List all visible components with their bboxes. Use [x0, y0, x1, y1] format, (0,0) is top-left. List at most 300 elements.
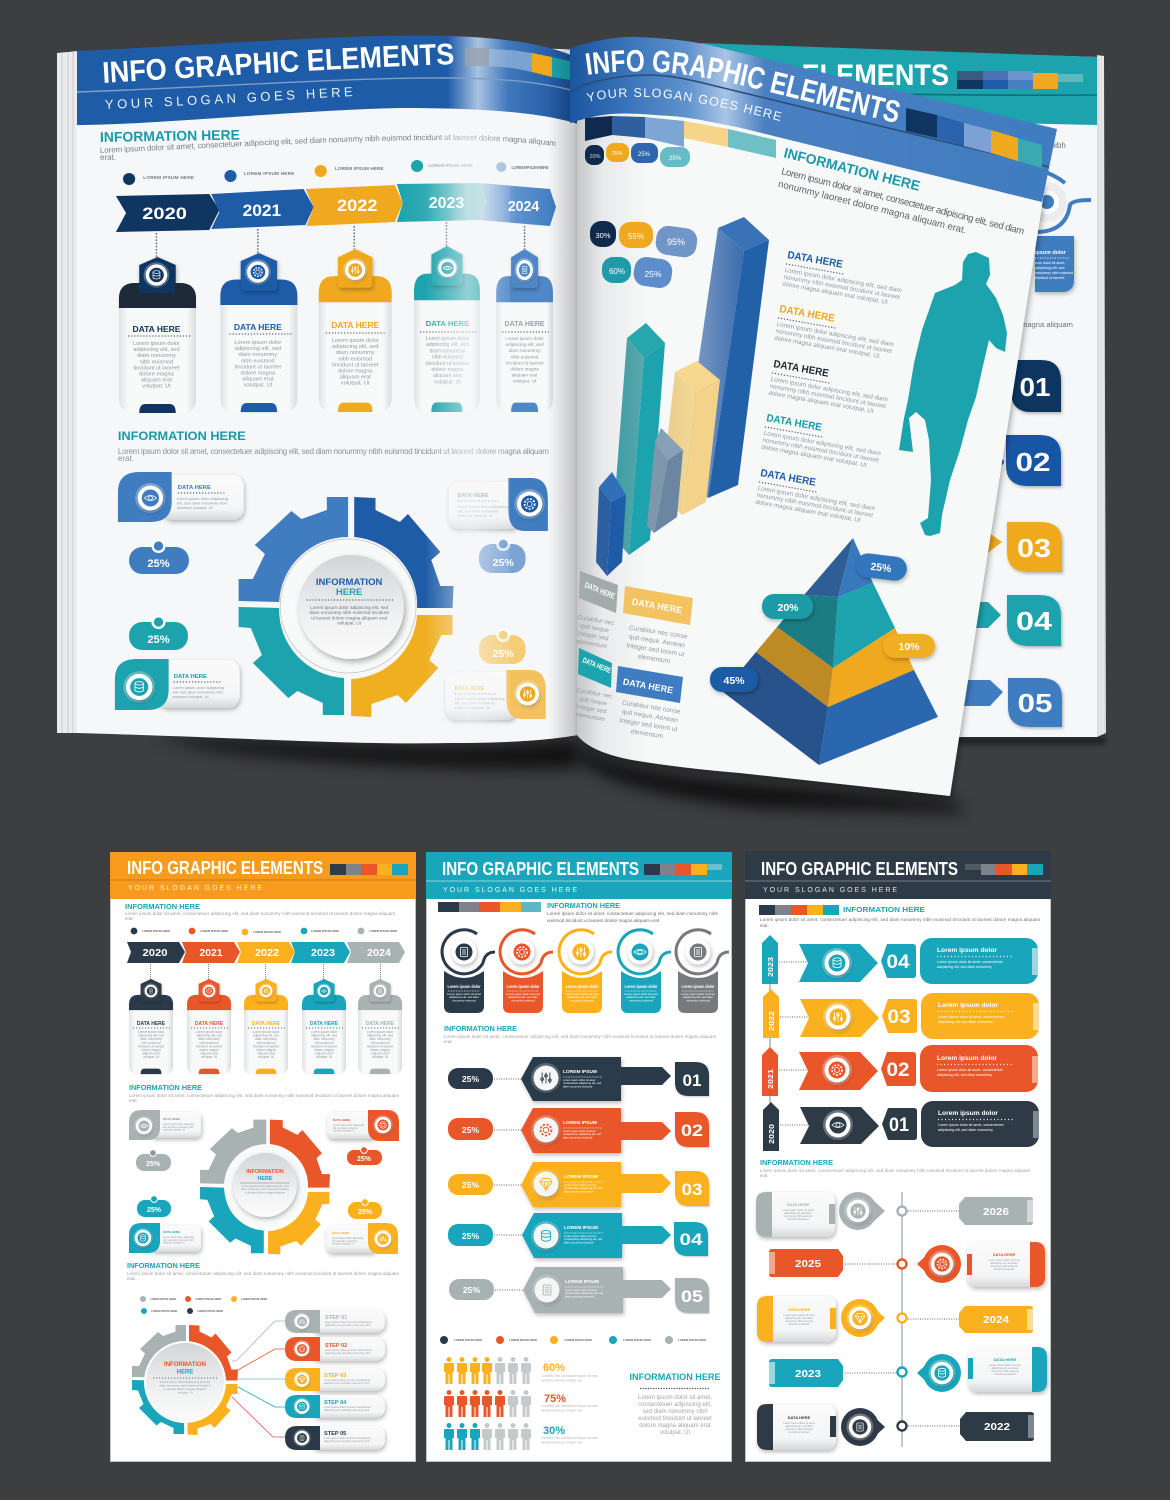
label teal [572, 648, 612, 724]
arrow timeline: 2022 [255, 948, 279, 959]
gear chart: INFORMATION [246, 1169, 284, 1175]
front page title: INFO GRAPHIC ELEMENTS [586, 50, 900, 122]
data card yellow: nibh euismod [257, 1041, 276, 1045]
callout top right: DATA HERE [333, 1118, 350, 1122]
timeline row 2022 [757, 1404, 1034, 1450]
arrow timeline [127, 942, 405, 963]
data card 2023: Lorem ipsum dolor [426, 336, 470, 342]
data card 2021: DATA HERE [234, 322, 282, 332]
row 01 2020: 2020 [767, 1124, 776, 1144]
label blue: elementum [630, 728, 664, 740]
row 02 2021: Lorem ipsum dolor [937, 1055, 998, 1062]
step 02: adipiscing elit, sed diam nonummy nibh [325, 1351, 371, 1355]
data card 2024: Lorem ipsum dolor [505, 336, 544, 341]
callout top right: euismod volutpat. Ut [333, 1130, 355, 1133]
data block 4 [761, 412, 884, 471]
data card teal [302, 979, 346, 1074]
data card yellow: aliquam erat [257, 1052, 275, 1056]
heading 2: INFORMATION HERE [444, 1024, 517, 1033]
label yellow: quit neque. Aenean [628, 634, 686, 649]
data block 5: dolore magna aliquam erat volutpat. Ut [755, 499, 861, 524]
callout top right: elit, sed diam nonummy [333, 1127, 359, 1130]
data card 2022: dolore magna [338, 369, 373, 374]
data card red: nibh euismod [200, 1041, 219, 1045]
data card grey: tincidunt ut laoreet [367, 1044, 393, 1048]
percent pill yellow: 25% [493, 648, 515, 660]
data card 2022 [319, 249, 392, 412]
data card 2020: aliquam erat [141, 378, 172, 384]
arrow timeline: 2020 [142, 948, 168, 959]
timeline row 2022: 2022 [984, 1421, 1010, 1433]
ring card teal: Lorem ipsum dolor [624, 984, 658, 989]
data card 2022: diam nonummy [336, 350, 375, 356]
ring card yellow [559, 930, 612, 1013]
timeline row 2023: adipiscing elit, sed diam [991, 1366, 1019, 1370]
heading 3: INFORMATION HERE [127, 1261, 200, 1270]
ring card teal: nonummy euismod [629, 998, 653, 1002]
step 01: Lorem ipsum dolor sit amet consectetuer [325, 1320, 372, 1324]
timeline row 2022: nonummy nibh euismod [785, 1427, 813, 1431]
data card 2022: aliquam erat [340, 375, 371, 381]
timeline arrow 2024: 2024 [508, 198, 540, 215]
data card teal: Lorem ipsum dolor [311, 1030, 338, 1034]
teal header: YOUR SLOGAN GOES HERE [443, 887, 577, 894]
ring card navy: Lorem ipsum dolor [448, 984, 481, 989]
legend: LOREM IPSUM HERE [678, 1338, 706, 1342]
heading 2 [760, 1158, 1030, 1178]
data block 4: DATA HERE [765, 412, 823, 434]
data card 2020 [119, 257, 196, 413]
ring card yellow: adipiscing elit, sed diam [567, 995, 598, 999]
heading: erat. [125, 916, 134, 921]
step 04: Lorem ipsum dolor sit amet consectetuer [324, 1405, 371, 1409]
percent pills: 25% [357, 1156, 372, 1163]
swatch strip and heading: Lorem ipsum dolor sit amet, consectetuer adipiscing elit, sed diam nonummy nibh [547, 911, 718, 916]
heading 2: erat. [129, 1098, 138, 1103]
data card 2023: DATA HERE [426, 319, 469, 328]
row 02: diam nonummy euismod [563, 1135, 593, 1139]
label teal: elementum [575, 712, 605, 723]
data card teal: dolore magna [314, 1048, 334, 1052]
pyramid label 20%: 20% [777, 602, 799, 614]
timeline arrow 2020: 2020 [142, 204, 187, 223]
callout bottom left: Lorem ipsum dolor adipiscing [163, 1236, 195, 1239]
row 04: Lorem ipsum dolor sit amet [564, 1234, 597, 1238]
timeline row 2022: Lorem ipsum dolor sit amet [783, 1421, 815, 1425]
timeline row 2025: Lorem ipsum dolor sit amet [988, 1258, 1020, 1262]
ring card teal: adipiscing elit, sed diam [626, 995, 657, 999]
callout top right: euismod volutpat. Ut [458, 514, 494, 518]
row 03: LOREM IPSUM [564, 1174, 598, 1180]
percent pill light blue: 25% [493, 557, 515, 569]
ring card red [500, 930, 553, 1013]
row 02 2021: 02 [886, 1060, 910, 1081]
small gear [132, 1325, 238, 1435]
front heading: Lorem ipsum dolor sit amet, consectetuer adipiscing elit, sed diam [780, 166, 1025, 237]
swatch strip and heading: euismod tincidunt ut laoreet dolore magna aliquam erat. [547, 918, 660, 923]
dark header: YOUR SLOGAN GOES HERE [763, 887, 897, 894]
small gear: HERE [177, 1370, 193, 1376]
callout top right: DATA HERE [458, 493, 489, 499]
people chart row 75%: Curabitur nec consequat neque. Aenean [541, 1404, 598, 1408]
data card 2022: volutpat. Ut [341, 381, 370, 387]
pyramid label 25% [855, 552, 908, 582]
legend: LOREM IPSUM HERE [200, 929, 228, 933]
data card teal: DATA HERE [310, 1021, 339, 1027]
row 04 2023: adipiscing elit, sed diam nonummy [937, 965, 992, 969]
data card yellow: Lorem ipsum dolor [253, 1030, 280, 1034]
row 02 2021: adipiscing elit, sed diam nonummy [937, 1073, 992, 1077]
data block 1 [782, 249, 905, 308]
heading 3: Lorem ipsum dolor sit amet, consectetuer adipiscing elit, sed diam nonummy nibh euismod tincidunt ut laoreet dolore magna aliquam [127, 1271, 399, 1276]
percent pills [136, 1147, 382, 1219]
row 05 [449, 1267, 709, 1313]
front page slogan: YOUR SLOGAN GOES HERE [586, 88, 782, 121]
label blue: quit neque. Aenean [621, 709, 679, 724]
gear chart: volutpat. Ut [337, 621, 362, 626]
small gear: volutpat. Ut [177, 1390, 193, 1394]
data card red: DATA HERE [195, 1021, 224, 1027]
data card yellow: dolore magna [256, 1048, 276, 1052]
data card 2021: nibh euismod [241, 358, 275, 364]
swatch strip and heading [759, 905, 1040, 928]
heading: INFORMATION HERE [125, 902, 200, 911]
heading 3: erat. [127, 1276, 136, 1281]
timeline row 2023: Lorem ipsum dolor sit amet [989, 1363, 1021, 1367]
back page ring and card [1027, 170, 1091, 292]
left heading: information here: Lorem ipsum dolor sit amet, consectetuer adipiscing elit, sed diam nonummy nibh euismod tincidunt ut laoreet dolore magna aliquam [100, 134, 556, 154]
small gear: ut laoreet dolore magna aliquam [163, 1387, 207, 1391]
data block 2: DATA HERE [778, 303, 836, 325]
data card 2024: aliquam erat [512, 373, 538, 378]
timeline arrow 2022 [306, 185, 403, 226]
callout top right [449, 478, 548, 531]
timeline row 2022: DATA HERE [788, 1415, 811, 1420]
row 05: 25% [463, 1285, 480, 1295]
callout top left [118, 472, 244, 522]
panel: front curled page [570, 36, 1057, 798]
medium percent pills [590, 221, 699, 289]
teal header: INFO GRAPHIC ELEMENTS [442, 859, 639, 879]
front page header band [570, 36, 1057, 202]
callout bottom right: elit, sed diam nonummy [455, 701, 495, 705]
info text block: consectetuer adipiscing elit, [638, 1402, 712, 1408]
section heading 2: erat. [118, 454, 134, 463]
label blue: Integer sed lorem ut [619, 717, 678, 733]
data card navy: adipiscing elit, sed [138, 1034, 164, 1038]
ring card grey [676, 930, 729, 1013]
data card teal: tincidunt ut laoreet [311, 1044, 337, 1048]
timeline row 2026: nonummy nibh euismod [784, 1214, 812, 1218]
medium percent pills: 95% [667, 237, 685, 247]
callout top right: Lorem ipsum dolor adipiscing [333, 1124, 365, 1127]
row 04 [448, 1213, 708, 1258]
row 03 2022: Lorem ipsum dolor sit amet, consectetuer [938, 1015, 1005, 1019]
data card 2020: DATA HERE [132, 324, 181, 334]
timeline row 2026 [756, 1192, 1033, 1237]
medium percent pills: 60% [609, 267, 625, 276]
data card 2024: nibh euismod [511, 354, 539, 359]
row 01: Lorem ipsum dolor sit amet [563, 1078, 596, 1082]
pyramid label 20% [762, 594, 813, 619]
row 01 2020: Lorem ipsum dolor sit amet, consectetuer [938, 1123, 1005, 1127]
small gear: INFORMATION [164, 1362, 206, 1368]
arrow timeline: 2021 [200, 948, 223, 959]
row 01 [448, 1057, 709, 1101]
row 01 2020 [763, 1101, 1039, 1151]
percent pill blue [129, 539, 189, 574]
connectors [150, 964, 380, 979]
left page content [115, 160, 556, 720]
back page ring and card: nonummy nibh euismod [1035, 271, 1073, 275]
data card teal: adipiscing elit, sed [311, 1034, 337, 1038]
step 03: Lorem ipsum dolor sit amet consectetuer [324, 1378, 371, 1382]
row 01: 25% [462, 1074, 479, 1084]
row 02 2021: 2021 [766, 1068, 775, 1089]
row 01 2020: adipiscing elit, sed diam nonummy [938, 1128, 993, 1132]
row 01: diam nonummy euismod [563, 1084, 593, 1088]
swatch strip and heading: INFORMATION HERE [843, 905, 925, 914]
label blue: DATA HERE [622, 677, 674, 695]
data card 2023: nibh euismod [432, 355, 463, 361]
timeline arrow 2021 [211, 189, 314, 229]
front heading: nonummy laoreet dolore magna aliquam erat. [777, 179, 967, 236]
ring card grey: Lorem ipsum dolor [682, 984, 715, 989]
row 04: diam nonummy euismod [564, 1240, 594, 1244]
legend: LOREM IPSUM HERE [253, 930, 281, 934]
data card yellow [244, 979, 288, 1074]
step 01: adipiscing elit, sed diam nonummy nibh [325, 1323, 371, 1327]
data card 2024 [496, 249, 553, 412]
page gloss and gutter [425, 50, 578, 741]
ring card grey: Lorem ipsum dolor sit amet [681, 992, 715, 996]
data card 2023: diam nonummy [430, 348, 466, 354]
data card navy: DATA HERE [137, 1021, 166, 1027]
callout top right [327, 1110, 399, 1141]
row 02: consectetuer adipiscing elit, sed [563, 1132, 602, 1136]
data card 2020: diam nonummy [137, 353, 176, 359]
callout bottom right [445, 670, 546, 720]
timeline row 2024: adipiscing elit, sed diam [785, 1316, 813, 1320]
legend: LOREM IPSUM HERE [335, 166, 384, 171]
data card yellow: adipiscing elit, sed [253, 1034, 279, 1038]
left page slogan: YOUR SLOGAN GOES HERE [105, 87, 352, 109]
row 05: consectetuer adipiscing elit, sed [565, 1291, 604, 1295]
small gear: diam nonummy nibh euismod tincidunt [159, 1384, 211, 1388]
row 03 [448, 1162, 709, 1207]
gear chart: Lorem ipsum dolor adipiscing elit, sed [310, 605, 389, 610]
small percent pills: 20% [590, 154, 601, 160]
people chart row 75%: 75% [544, 1393, 566, 1405]
data card navy: dolore magna [141, 1048, 161, 1052]
timeline row 2024: DATA HERE [788, 1307, 811, 1312]
people chart row 75% [444, 1390, 598, 1417]
timeline row 2022: adipiscing elit, sed diam [785, 1424, 813, 1428]
bar: tall blue [682, 217, 769, 498]
row 04 2023 [762, 935, 1038, 984]
data card red: Lorem ipsum dolor [196, 1030, 223, 1034]
label teal: Integer sed [576, 704, 607, 715]
data card 2020: volutpat. Ut [142, 384, 171, 390]
small percent pills: 25% [638, 152, 651, 158]
ring card yellow: Lorem ipsum dolor sit amet [565, 992, 599, 996]
3D bar chart [596, 217, 769, 576]
pyramid label 45%: 45% [723, 675, 745, 687]
data card 2021: Lorem ipsum dolor [234, 340, 281, 346]
callout bottom left: elit, sed diam nonummy nibh [163, 1239, 194, 1242]
step 02: STEP 02 [325, 1343, 347, 1349]
data card 2023 [414, 246, 480, 412]
percent pills: 25% [358, 1209, 373, 1216]
data card navy: aliquam erat [142, 1052, 160, 1056]
timeline row 2024: nonummy nibh euismod [785, 1319, 813, 1323]
data card 2024: dolore magna [510, 367, 539, 371]
info text block: volutpat. Ut [660, 1430, 691, 1436]
data card 2023: volutpat. Ut [434, 379, 461, 385]
label grey: elementum [576, 638, 607, 650]
timeline row 2026: DATA HERE [787, 1202, 810, 1207]
year tower line [769, 940, 771, 1148]
percent pill teal: 25% [147, 634, 170, 646]
left page header swatches [465, 48, 570, 80]
row 05: diam nonummy euismod [565, 1294, 595, 1298]
medium percent pills: 30% [595, 231, 611, 240]
data card 2024: DATA HERE [505, 321, 545, 328]
heading 2: Lorem ipsum dolor sit amet, consectetuer adipiscing elit, sed diam nonummy nibh euismod tincidunt ut laoreet dolore magna aliquam [129, 1093, 399, 1098]
row 04 2023: 2023 [766, 957, 775, 977]
legend: LOREM IPSUM HERE [142, 929, 170, 933]
callout bottom left: DATA HERE [163, 1230, 180, 1234]
gear chart: diam nonummy nibh euismod tincidunt [241, 1187, 289, 1191]
ring card red: nonummy euismod [511, 998, 535, 1002]
percent pill yellow [479, 628, 526, 664]
swatch strip and heading: INFORMATION HERE [547, 901, 620, 910]
data block 5: Lorem ipsum dolor adipiscing elit, sed diam [757, 485, 875, 512]
back page title: INFO GRAPHIC ELEMENTS [597, 59, 949, 92]
step 01 [285, 1310, 385, 1333]
row 01 2020: Lorem ipsum dolor [938, 1110, 999, 1117]
timeline row 2025: DATA HERE [993, 1252, 1016, 1257]
ring card navy: adipiscing elit, sed diam [449, 995, 480, 999]
front page swatch strip [585, 116, 776, 158]
number tile 04 [1007, 595, 1061, 646]
callout top left: euismod volutpat. Ut [163, 1129, 185, 1132]
teal header [426, 852, 732, 899]
back page ring and card: ipsum dolor [1035, 250, 1067, 256]
small percent pills [585, 143, 690, 167]
ring card teal [618, 930, 671, 1013]
number tile 03 [1007, 522, 1062, 572]
ring card yellow: Lorem ipsum dolor [566, 984, 599, 989]
back page text fragments [1021, 141, 1073, 329]
data card grey: diam nonummy [369, 1037, 391, 1041]
pyramid label 25%: 25% [870, 561, 893, 575]
row 03: 03 [682, 1180, 702, 1199]
panel: teal sheet [426, 852, 732, 1462]
data card yellow: diam nonummy [255, 1037, 277, 1041]
data card yellow: DATA HERE [252, 1021, 281, 1027]
panel: left page [57, 36, 578, 744]
percent pills: 25% [146, 1161, 161, 1168]
timeline row 2025: nonummy nibh euismod [990, 1264, 1018, 1268]
arrows into number tiles [955, 459, 1004, 706]
ring card red: Lorem ipsum dolor [506, 984, 540, 989]
timeline arrow 2024 [479, 183, 556, 226]
callout bottom right: DATA HERE [455, 686, 485, 692]
orange header [110, 852, 416, 899]
heading 3 [127, 1261, 399, 1281]
row 03 2022: 03 [888, 1007, 910, 1028]
data card 2020: nibh euismod [140, 359, 173, 365]
data block 5 [755, 467, 878, 526]
back page ring and card: sum dolor sit amet, [1035, 261, 1065, 265]
data card navy: Lorem ipsum dolor [138, 1030, 165, 1034]
data card 2021: dolore magna [241, 371, 276, 376]
row 02: 02 [681, 1121, 703, 1140]
timeline row 2025: 2025 [795, 1258, 821, 1270]
callout top left: Lorem ipsum dolor adipiscing [163, 1123, 195, 1126]
businessman silhouette [899, 252, 1007, 536]
callout bottom right: euismod volutpat. Ut [455, 706, 491, 710]
row 03: 25% [462, 1180, 479, 1190]
timeline row 2023: tincidunt ut laoreet [994, 1372, 1016, 1376]
data card 2024: adipiscing elit, sed [506, 342, 544, 347]
swatch strip and heading: Lorem ipsum dolor sit amet, consectetuer adipiscing elit, sed diam nonummy nibh euismod tincidunt ut laoreet dolore magna aliquam [760, 917, 1040, 922]
data card 2021: diam nonummy [239, 352, 277, 358]
row 05: LOREM IPSUM [565, 1279, 599, 1285]
legend: LOREM IPSUM HERE [428, 163, 473, 168]
data card grey: DATA HERE [366, 1021, 395, 1027]
info text block: dolore magna aliquam erat [639, 1423, 711, 1429]
step 02: Lorem ipsum dolor sit amet consectetuer [325, 1348, 372, 1352]
label yellow [623, 586, 693, 667]
pyramid label 45% [710, 667, 758, 692]
label grey: Integer sed [577, 630, 610, 642]
callout top left: euismod volutpat. Ut [177, 505, 214, 510]
data block 3: DATA HERE [772, 358, 830, 380]
number tile 01: 01 [1020, 372, 1050, 402]
timeline row 2024: Lorem ipsum dolor sit amet [783, 1313, 815, 1317]
data card 2021: adipiscing elit, sed [235, 346, 281, 352]
label grey: DATA HERE [583, 581, 617, 601]
row 02 2021: Lorem ipsum dolor sit amet, consectetuer [937, 1068, 1004, 1072]
label yellow: Integer sed lorem ut [626, 642, 685, 658]
timeline row 2024: 2024 [983, 1314, 1009, 1326]
data card 2020: Lorem ipsum dolor [133, 341, 180, 347]
heading 2: INFORMATION HERE [129, 1083, 202, 1092]
heading: Lorem ipsum dolor sit amet, consectetuer adipiscing elit, sed diam nonummy nibh euismod tincidunt ut laoreet dolore magna aliquam [125, 911, 395, 916]
legend: LOREM IPSUM HERE [454, 1338, 482, 1342]
data card 2023: dolore magna [431, 367, 464, 373]
orange header: YOUR SLOGAN GOES HERE [128, 885, 262, 892]
data card navy: volutpat. Ut [143, 1055, 159, 1059]
callout top right: Lorem ipsum dolor adipiscing [458, 505, 508, 509]
legend 2: LOREM IPSUM HERE [151, 1309, 177, 1313]
data card 2024: volutpat. Ut [513, 379, 537, 384]
label teal: DATA HERE [581, 656, 612, 675]
timeline arrow 2020 [116, 194, 219, 232]
data card 2021: volutpat. Ut [244, 383, 273, 389]
arrow timeline: 2024 [367, 948, 391, 959]
people chart row 60% [444, 1357, 598, 1384]
step connector lines [232, 1321, 285, 1437]
label yellow: DATA HERE [631, 597, 683, 615]
data card navy [129, 979, 173, 1074]
callout bottom right: elit, sed diam nonummy [332, 1240, 358, 1243]
ring card red: Lorem ipsum dolor sit amet [506, 992, 540, 996]
connectors [156, 222, 525, 257]
left page title: INFO GRAPHIC ELEMENTS [104, 44, 454, 83]
